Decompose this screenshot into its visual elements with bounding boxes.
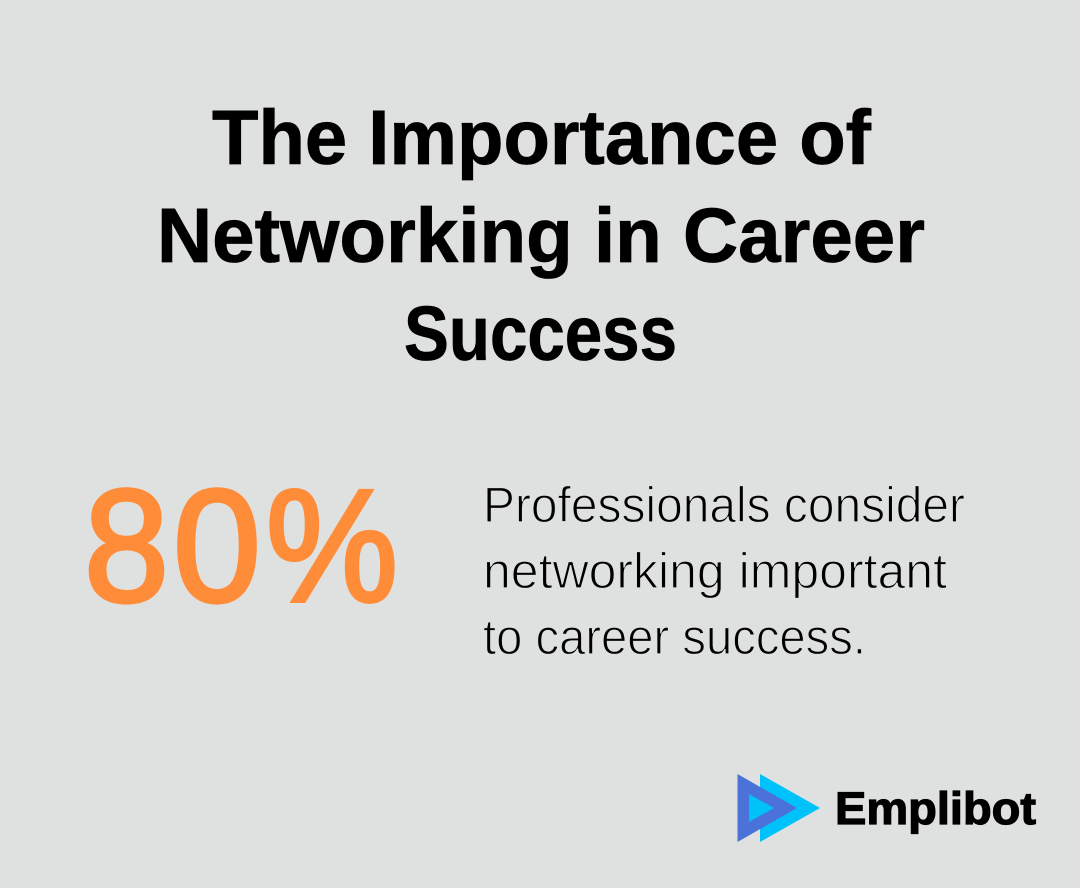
statistic: 80%: 0 [173,456,261,635]
description text: Professionals consider [483,477,965,533]
title: The Importance of [212,95,871,181]
logo wordmark: Emplibot [835,783,1036,834]
title [157,95,925,377]
statistic: 80%: 8 [84,456,169,635]
description text [483,477,965,665]
title: Success [404,291,677,377]
description text: networking important [483,543,947,599]
description text: to career success. [483,609,866,665]
icon: play triangles [738,774,820,842]
statistic: 80% [84,456,398,635]
logo: Emplibot [738,774,1036,842]
statistic: 80%: % [266,456,398,635]
title: Networking in Career [157,193,925,279]
